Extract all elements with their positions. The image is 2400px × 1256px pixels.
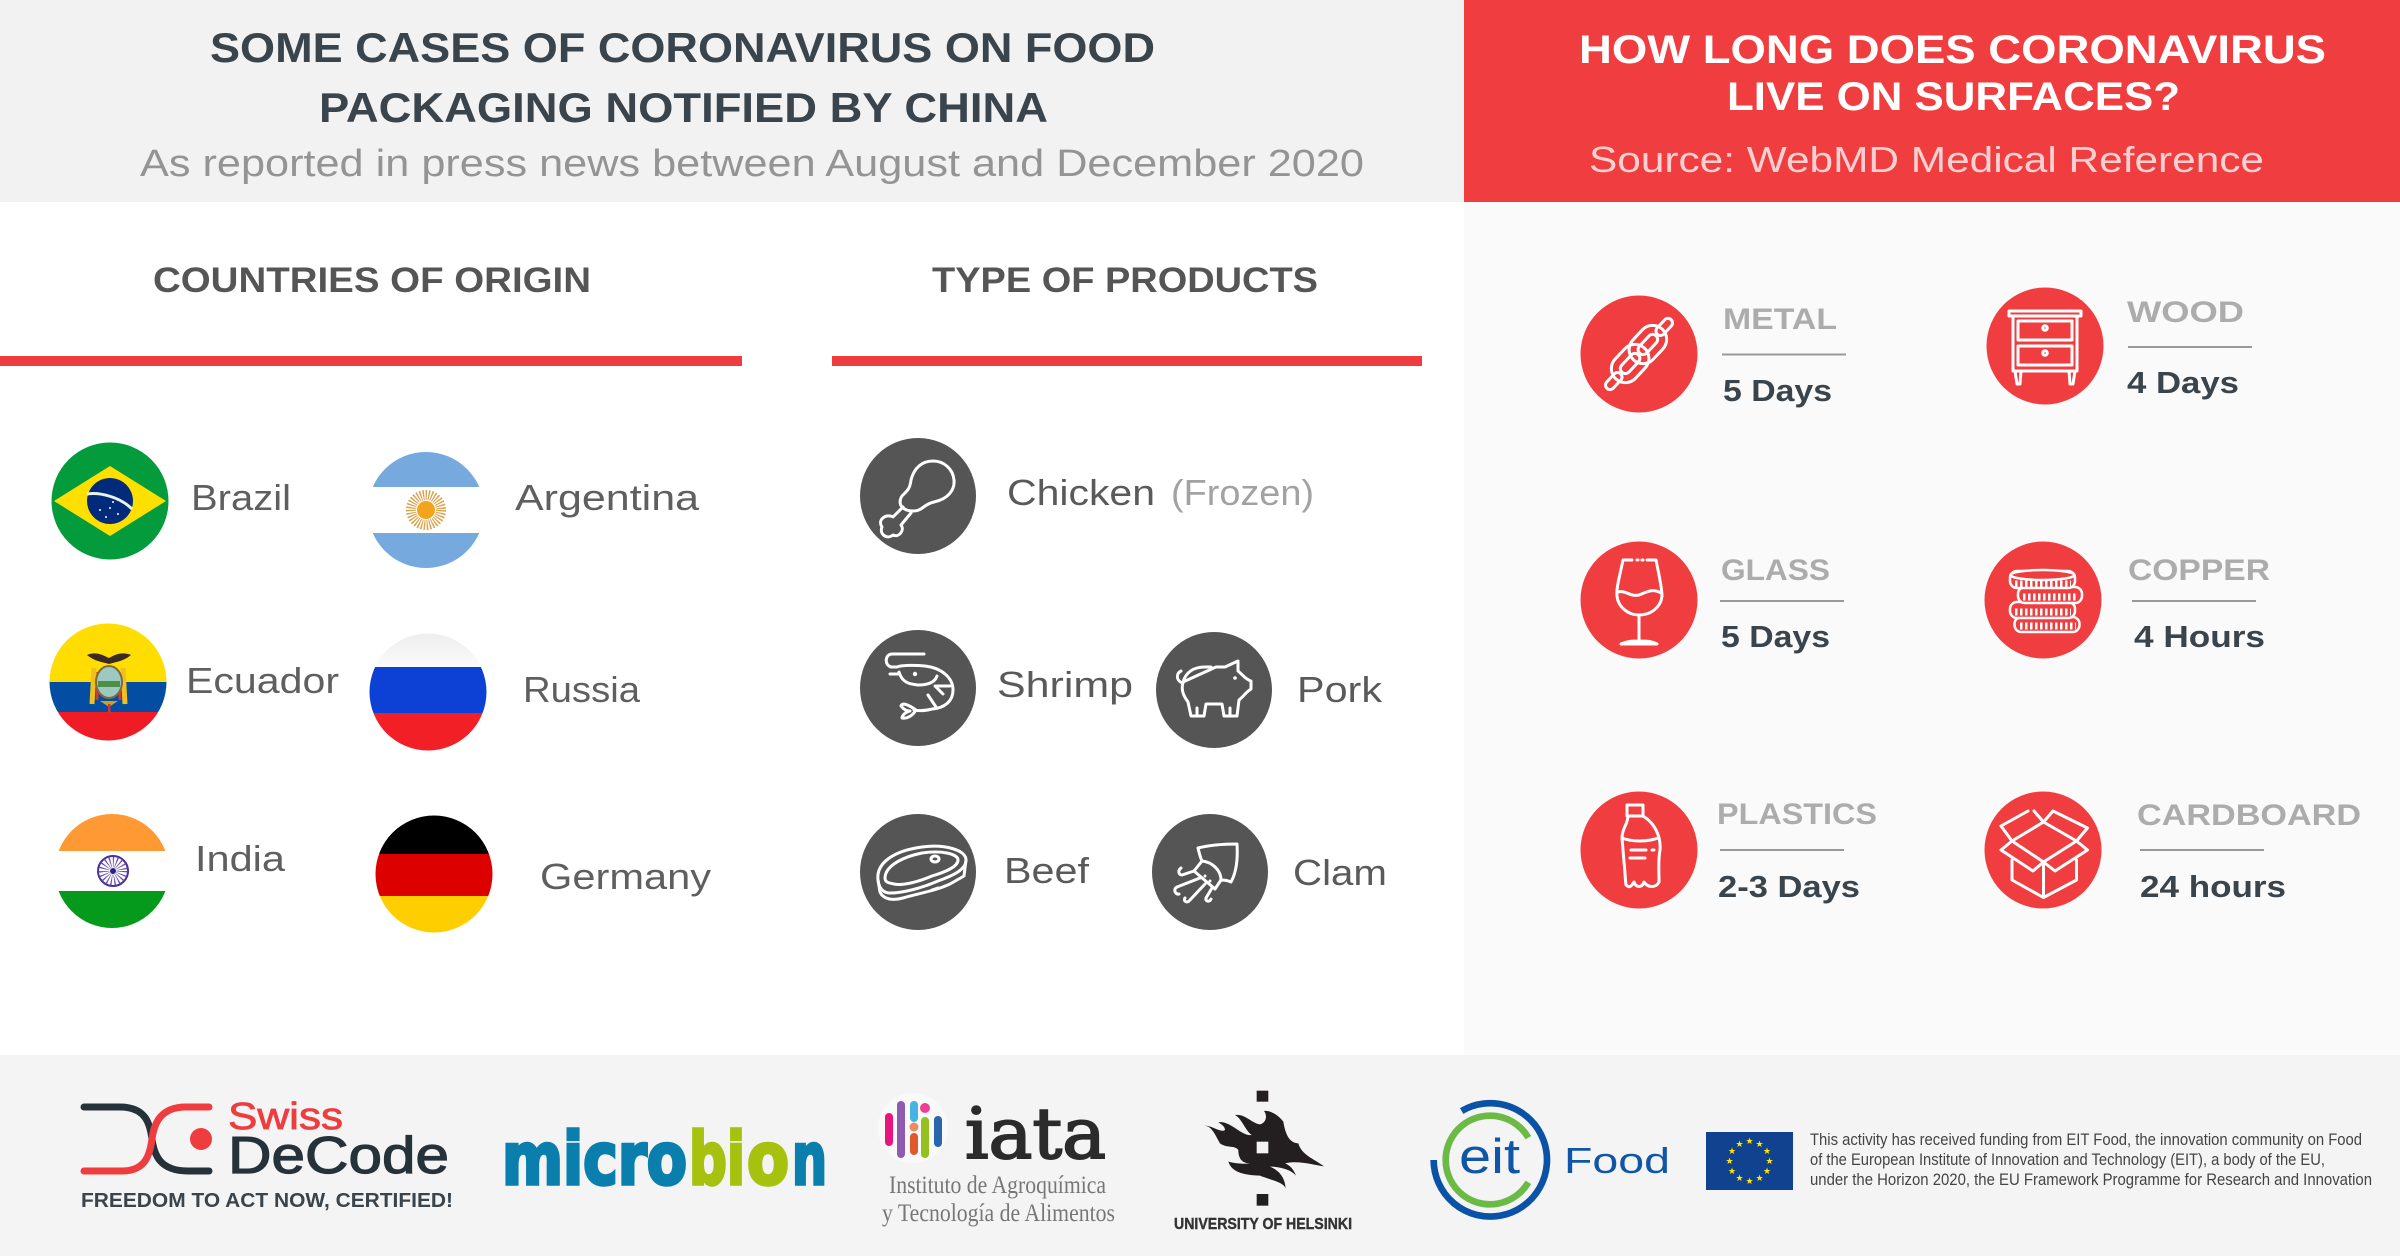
label: clam: Clam [1293,852,1387,893]
logo: EIT Food: Food [1564,1140,1670,1181]
surface: metal: 5 Days [1723,373,1832,408]
surface: cardboard: 24 hours [2140,869,2286,904]
logo: IATA [878,1093,1115,1227]
label: Ecuador: Ecuador [186,660,339,701]
heading: countries of origin: COUNTRIES OF ORIGIN [153,261,591,300]
logo: Swiss DeCode [81,1096,453,1212]
logo: EU flag: ★ [1735,1140,1744,1150]
logo: EU flag: ★ [1763,1167,1771,1177]
logo: microbion: n [792,1117,827,1201]
funding statement: of the European Institute of Innovation and Technology (EIT), a body of the EU, [1810,1150,2325,1169]
title [210,24,1155,131]
logo: EU flag: ★ [1728,1167,1736,1177]
logo: University of Helsinki: UNIVERSITY OF HELSINKI [1174,1216,1352,1233]
heading: type of products: TYPE OF PRODUCTS [932,261,1318,300]
flag: Brazil [50,440,170,562]
icon: chicken [860,438,976,554]
header: food packaging cases [0,0,1464,202]
surface: copper [2128,554,2270,654]
red rule: products [832,356,1422,366]
logo: EIT Food: eit [1459,1130,1520,1184]
label: chicken: Chicken [1007,472,1155,513]
logo: EU flag: ★ [1735,1174,1744,1184]
logo: EU flag: ★ [1755,1140,1764,1150]
logo: University of Helsinki [1174,1091,1352,1233]
panel: surfaces [1464,202,2400,1055]
logo: EU flag [1706,1132,1793,1190]
source line: Source: WebMD Medical Reference [1589,139,2264,180]
surface: metal: METAL [1723,303,1837,336]
title: SOME CASES OF CORONAVIRUS ON FOOD [210,24,1155,71]
surfaces title: HOW LONG DOES CORONAVIRUS [1579,28,2326,72]
logo: IATA: iata [965,1093,1106,1175]
logo: EU flag: ★ [1755,1174,1764,1184]
surface: plastics [1717,798,1877,904]
surface: wood: WOOD [2127,296,2244,329]
surface: plastics: PLASTICS [1717,798,1877,831]
flag: Russia [366,632,490,753]
panel: type of products [832,261,1422,930]
label: Germany: Germany [540,856,711,897]
surface: wood [2127,296,2252,400]
logo: EU flag: ★ [1763,1147,1771,1157]
flag: Argentina [372,452,480,568]
surface: glass: 5 Days [1721,619,1830,654]
icon: shrimp [860,630,976,746]
logo: IATA: y Tecnología de Alimentos [882,1200,1115,1227]
surface: plastics: 2-3 Days [1718,869,1860,904]
header: surfaces [1464,0,2400,202]
surface: glass [1720,554,1844,654]
logo: EIT Food [1434,1103,1670,1217]
icon: plastic bottle [1580,792,1698,908]
label: beef: Beef [1004,850,1090,891]
surface: glass: GLASS [1721,554,1830,587]
label: Argentina: Argentina [515,477,700,518]
label: Brazil: Brazil [191,477,291,518]
subtitle: As reported in press news between August and December 2020 [140,143,1364,185]
surface: cardboard [2137,799,2361,904]
surface: copper: 4 Hours [2134,619,2265,654]
label: frozen: (Frozen) [1171,472,1314,513]
surface: copper: COPPER [2128,554,2270,587]
logo: microbion [502,1117,827,1201]
icon: wood nightstand [1986,288,2104,404]
logo: Swiss DeCode: Swiss [228,1096,343,1138]
logo: microbion: bi [689,1117,745,1201]
flag: Ecuador [48,622,170,742]
icon: copper coins [1984,542,2102,658]
logo: EU flag: ★ [1745,1177,1754,1187]
surfaces title [1579,28,2326,119]
logo: EU flag: ★ [1725,1157,1734,1167]
logo: EU flag: ★ [1728,1147,1736,1157]
flag: Germany [372,814,496,934]
footer: partner logos [0,1055,2400,1256]
red rule: countries [0,356,742,366]
label: pork: Pork [1297,669,1383,710]
surface: cardboard: CARDBOARD [2137,799,2361,832]
surface: wood: 4 Days [2127,365,2239,400]
label: India: India [195,838,286,879]
funding statement [1810,1130,2372,1189]
logo: EU flag: ★ [1745,1137,1754,1147]
icon: glass [1580,542,1698,658]
icon: cardboard box [1984,792,2102,908]
logo: microbion: micro [502,1117,687,1201]
icon: beef [860,814,976,930]
title: PACKAGING NOTIFIED BY CHINA [319,84,1048,131]
logo: IATA: Instituto de Agroquímica [889,1172,1106,1199]
flag: India [58,814,166,928]
panel: countries of origin [0,261,742,934]
surfaces title: LIVE ON SURFACES? [1727,75,2180,119]
logo: Swiss DeCode: FREEDOM TO ACT NOW, CERTIFIED! [81,1190,453,1212]
icon: clam [1152,814,1268,930]
logo: EU flag: ★ [1765,1157,1774,1167]
label: Russia: Russia [523,669,641,710]
icon: pork [1156,632,1272,748]
icon: metal chain [1580,296,1698,412]
label: shrimp: Shrimp [997,664,1133,705]
logo: Swiss DeCode: DeCode [228,1127,449,1185]
surface: metal [1722,303,1846,408]
logo: microbion: o [747,1117,789,1201]
